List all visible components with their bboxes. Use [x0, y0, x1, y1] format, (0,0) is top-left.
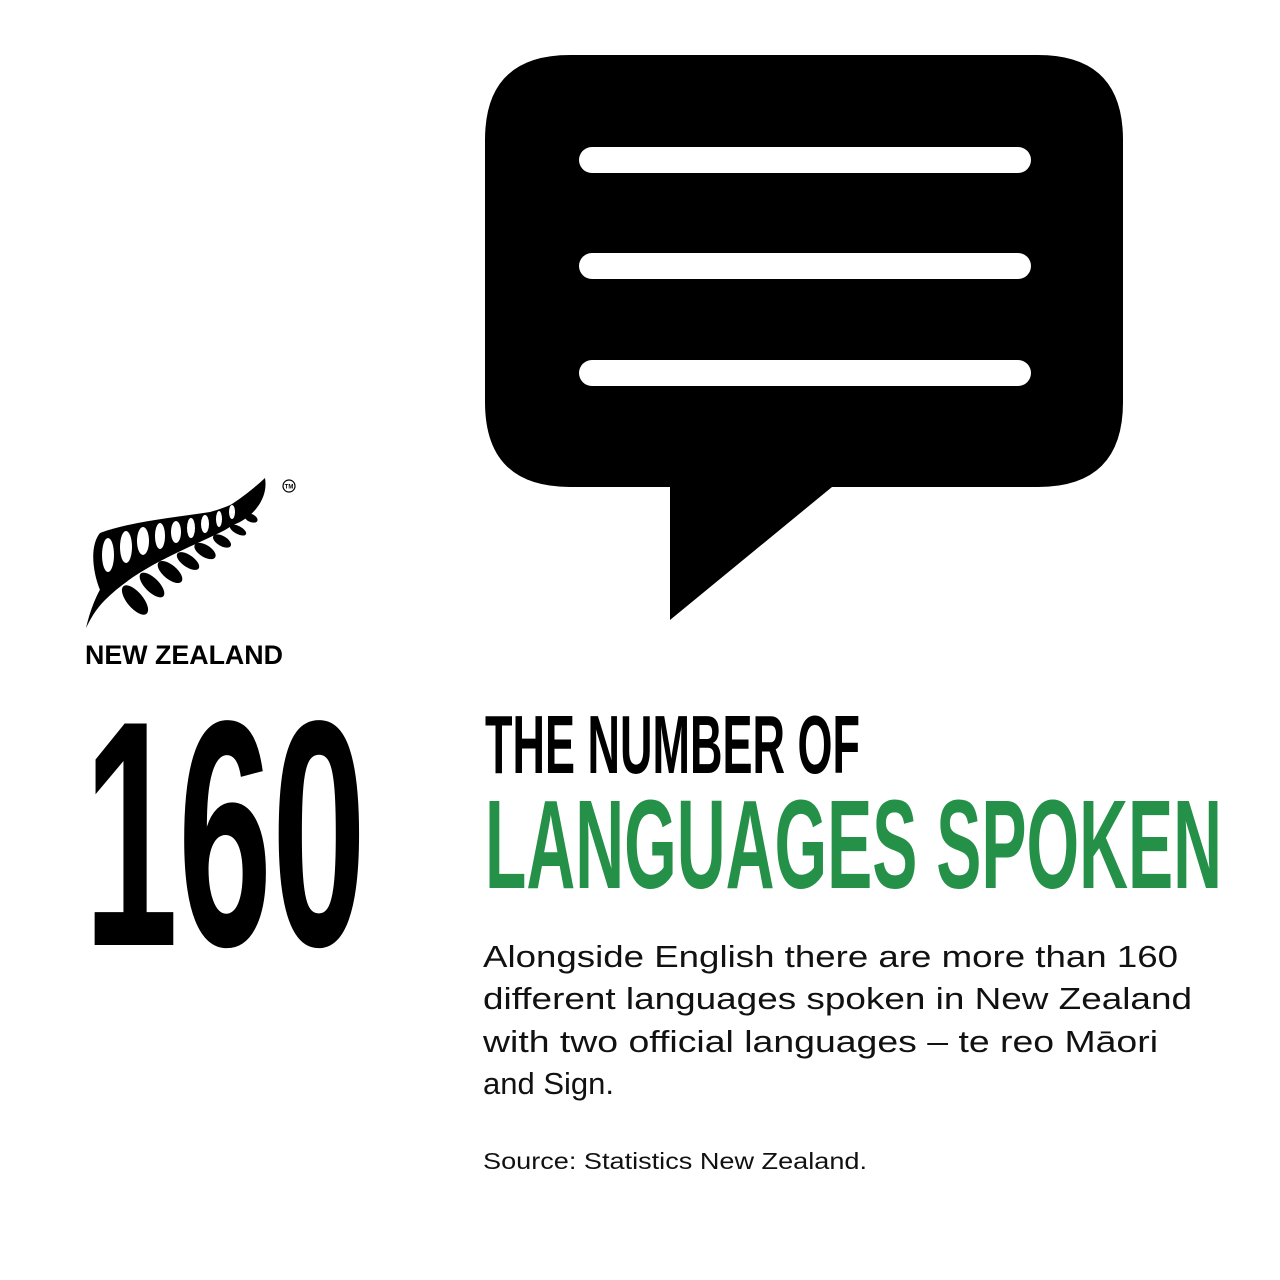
logo: silver fern New Zealand: TM: [285, 484, 293, 490]
body text: and Sign.: [483, 1066, 614, 1101]
heading line 1: THE NUMBER OF: [485, 698, 860, 791]
body text: Alongside English there are more than 160: [483, 939, 1178, 974]
logo: silver fern New Zealand: NEW ZEALAND: [85, 640, 283, 670]
icon: speech bubble: [485, 55, 1123, 620]
big number 160: 160: [84, 655, 366, 1014]
source: Source: Statistics New Zealand.: [483, 1148, 867, 1174]
body text: different languages spoken in New Zealand: [483, 981, 1192, 1016]
body text: [482, 939, 1192, 1101]
logo: silver fern New Zealand: [85, 478, 295, 670]
body text: with two official languages – te reo Māori: [482, 1024, 1158, 1059]
